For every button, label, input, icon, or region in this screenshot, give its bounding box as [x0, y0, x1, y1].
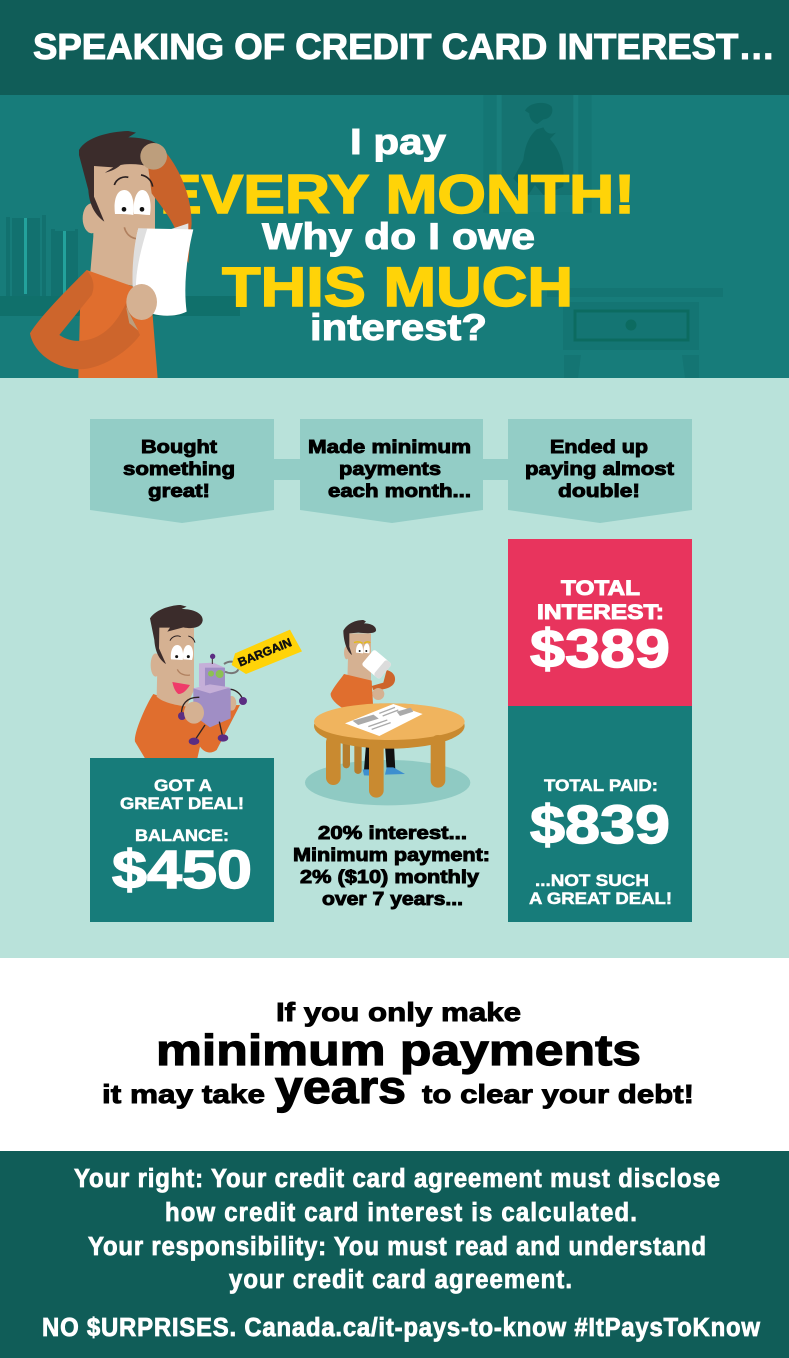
- text: THIS MUCH: THIS MUCH: [222, 255, 573, 318]
- text: interest terms: [293, 823, 490, 909]
- text: interest terms: Minimum payment:: [293, 845, 490, 865]
- step 3 banner: Ended up: [550, 437, 648, 457]
- step 1 banner: something: [123, 459, 235, 479]
- card: balance: $450: [112, 840, 252, 900]
- connector bars: [270, 459, 510, 480]
- step 1 banner: [90, 419, 274, 523]
- panel: minimum payments message: to clear your debt!: [422, 1079, 694, 1109]
- card: total paid: $839: [530, 795, 670, 855]
- panel: minimum payments message: it may take: [102, 1079, 265, 1109]
- step 3 banner: [508, 419, 692, 523]
- card: total paid: A GREAT DEAL!: [529, 890, 672, 908]
- card: total paid: ...NOT SUCH: [535, 872, 649, 890]
- panel: hero: [0, 95, 789, 378]
- step 2 banner: Made minimum: [308, 437, 471, 457]
- step 1 banner: Bought: [141, 437, 217, 457]
- step 2 banner: payments: [339, 459, 441, 479]
- text: rights copy: NO $URPRISES. Canada.ca/it-pays-to-know #ItPaysToKnow: [42, 1313, 761, 1342]
- card: total paid: TOTAL PAID:: [544, 777, 658, 795]
- text: EVERY MONTH!: EVERY MONTH!: [160, 163, 635, 225]
- panel: minimum payments message: minimum payments: [156, 1026, 641, 1075]
- step 2 banner: each month...: [328, 481, 471, 501]
- illustration: man reading statement: [30, 131, 193, 378]
- background: bookshelf: [0, 215, 240, 316]
- card: total interest: TOTAL: [561, 576, 640, 600]
- text: rights copy: how credit card interest is calculated.: [165, 1198, 637, 1227]
- panel: story section: [0, 378, 789, 958]
- card: balance: [90, 758, 274, 922]
- panel: minimum payments message: [0, 958, 789, 1151]
- card: total interest: INTEREST:: [537, 600, 664, 624]
- step 1 banner: great!: [148, 481, 210, 501]
- background: framed picture: [483, 95, 592, 213]
- card: balance: GOT A: [154, 777, 212, 795]
- background: side table: [547, 288, 723, 378]
- step 3 banner: double!: [558, 481, 640, 501]
- card: total interest: $389: [530, 619, 670, 679]
- panel: minimum payments message: If you only make: [276, 997, 521, 1027]
- text: rights copy: Your responsibility: You must read and understand: [88, 1232, 706, 1261]
- title: SPEAKING OF CREDIT CARD INTEREST…: [33, 26, 775, 67]
- card: total paid: [508, 706, 692, 922]
- text: rights copy: [42, 1164, 761, 1342]
- card: balance: GREAT DEAL!: [120, 795, 244, 813]
- step 2 banner: [300, 419, 483, 523]
- text: interest terms: over 7 years...: [322, 889, 463, 909]
- text: rights copy: Your right: Your credit card agreement must disclose: [74, 1164, 720, 1193]
- panel: minimum payments message: years: [275, 1061, 406, 1113]
- text: Why do I owe: Why do I owe: [262, 216, 535, 257]
- text: I pay: I pay: [350, 121, 446, 162]
- step 3 banner: paying almost: [525, 459, 674, 479]
- text: interest terms: 20% interest...: [318, 823, 467, 843]
- illustration: man at table with mug: [305, 620, 470, 805]
- text: rights copy: your credit card agreement.: [229, 1265, 572, 1294]
- text: interest terms: 2% ($10) monthly: [300, 867, 479, 887]
- card: balance: BALANCE:: [135, 827, 229, 845]
- panel: footer rights and responsibilities: [0, 1151, 789, 1358]
- panel: top title band: [0, 0, 789, 95]
- text: interest?: interest?: [310, 307, 487, 348]
- illustration: man with bargain robot: [135, 605, 302, 758]
- illustration: man with bargain robot: BARGAIN: [236, 635, 294, 669]
- card: total interest: [508, 539, 692, 706]
